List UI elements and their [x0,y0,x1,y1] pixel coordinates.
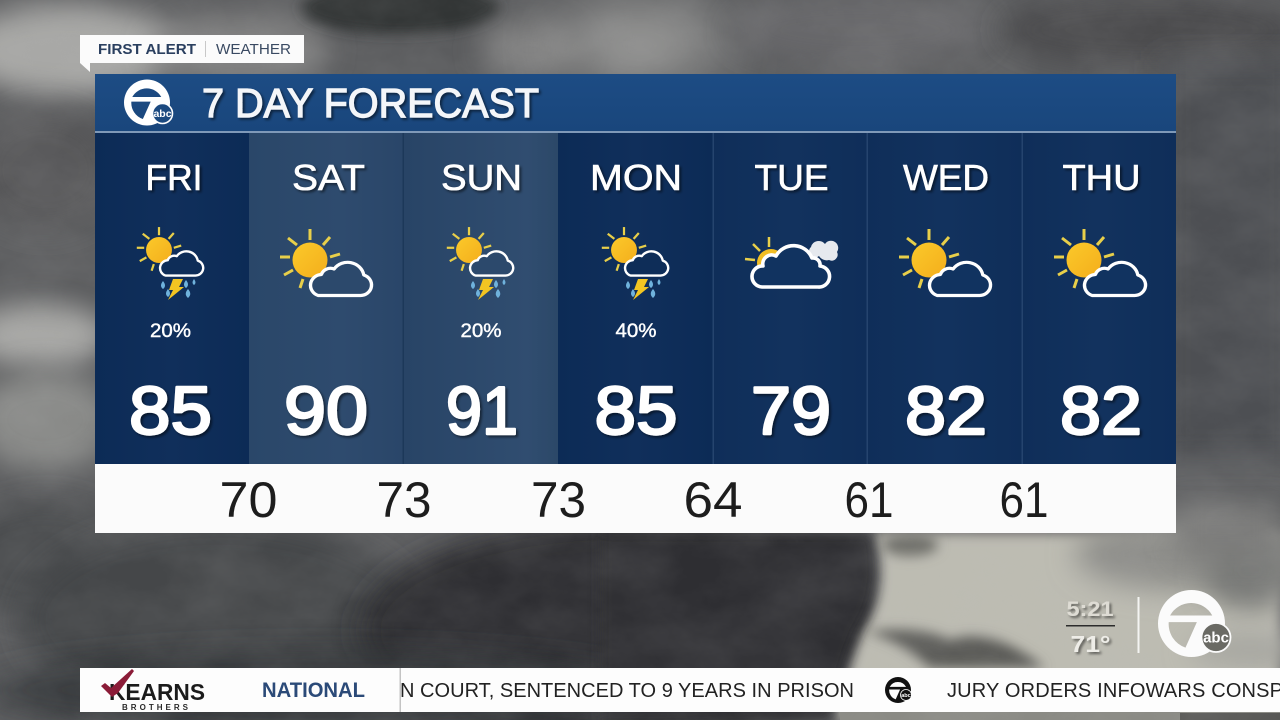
icon: cloud with small sun and grey cloud [745,237,838,287]
title: 7 DAY FORECAST [202,80,539,126]
tab: First Alert Weather: FIRST ALERT [98,41,196,58]
day: Monday [590,157,682,449]
station logo [1158,590,1230,657]
day: Thursday: 82 [1060,373,1142,449]
day: Friday [129,157,212,449]
low temperatures band: 64 [684,472,742,528]
header logo: 7 abc: abc [153,108,172,120]
day: Tuesday: TUE [754,157,828,198]
low temperatures band: 73 [376,472,432,528]
day: Wednesday: WED [903,157,989,198]
day: Monday: 85 [594,373,678,449]
day: Sunday [441,157,522,449]
day: Saturday [280,157,372,449]
day: Saturday: SAT [292,157,365,198]
day: Thursday: THU [1062,157,1140,198]
ticker headlines: N COURT, SENTENCED TO 9 YEARS IN PRISON [400,680,854,702]
day: Tuesday [745,157,838,449]
day: Friday: 20% [150,321,191,342]
tab: First Alert Weather [80,35,304,72]
header logo: 7 abc [124,80,172,126]
day: Saturday: 90 [284,373,368,449]
station logo: abc [1203,630,1229,646]
day: Monday: MON [590,157,682,198]
icon: sun and cloud [280,229,372,296]
clock and temperature: 71° [1070,631,1110,657]
day: Friday: FRI [146,157,202,198]
sponsor logo: Kearns Brothers [101,669,205,712]
icon: sun, cloud, storm [447,227,513,300]
low temperatures band: 73 [531,472,586,528]
sponsor logo: Kearns Brothers: BROTHERS [122,703,189,712]
icon: sun, cloud, storm [137,227,203,300]
ticker category: NATIONAL [262,679,365,702]
day: Sunday: SUN [441,157,522,198]
ticker headlines [402,683,1280,700]
low temperatures band: 70 [220,472,278,528]
day: Wednesday: 82 [905,373,987,449]
day: Sunday: 91 [446,373,518,449]
day: Monday: 40% [616,321,657,342]
day: Wednesday [899,157,991,449]
ticker headlines: JURY ORDERS INFOWARS CONSP [947,680,1280,702]
icon: sun and cloud [899,229,991,296]
clock and temperature: 5:21 [1066,598,1114,621]
panel: forecast columns [95,133,1176,464]
ticker logo: abc [901,693,911,699]
clock and temperature [1066,597,1140,657]
day: Friday: 85 [129,373,212,449]
icon: sun, cloud, storm [602,227,668,300]
news ticker [80,668,1280,712]
header bar [95,74,1176,133]
day: Tuesday: 79 [751,373,831,449]
low temperatures band: 61 [844,472,894,528]
day: Sunday: 20% [460,321,502,342]
ticker logo [885,677,912,703]
tab: First Alert Weather: WEATHER [216,41,291,58]
day: Thursday [1054,157,1146,449]
low temperatures band [95,464,1176,533]
sponsor logo: Kearns Brothers: KEARNS [109,679,205,705]
icon: sun and cloud [1054,229,1146,296]
low temperatures band: 61 [1000,472,1048,528]
